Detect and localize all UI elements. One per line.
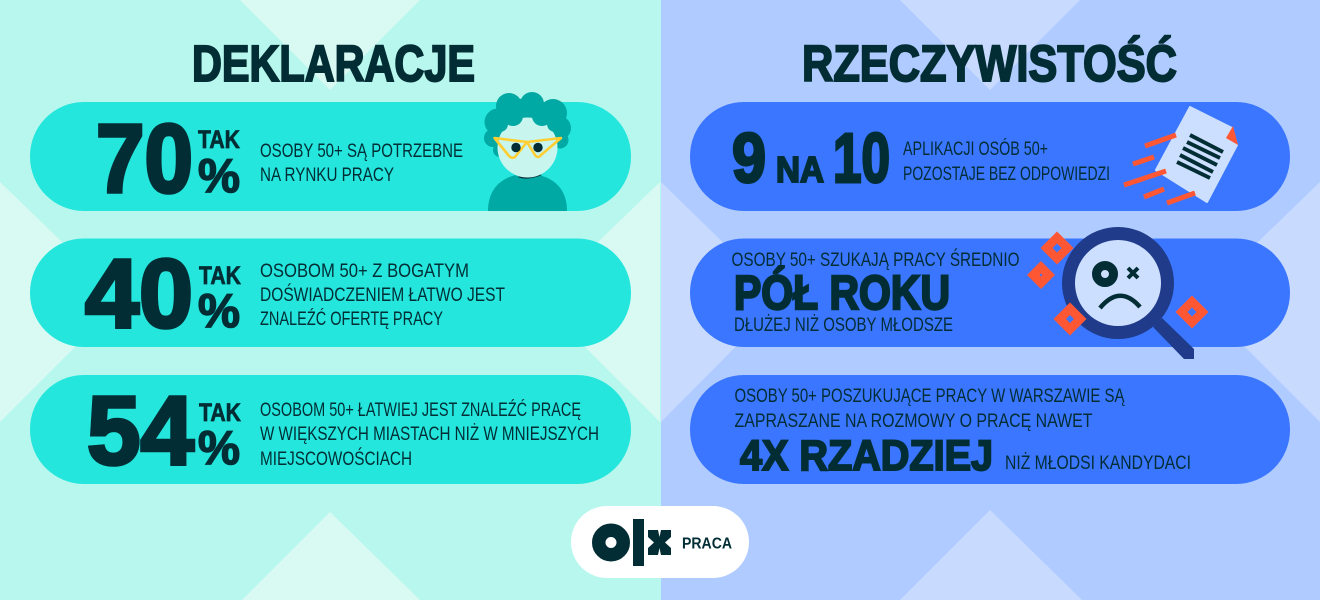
panel: 70 percent	[30, 102, 631, 213]
text: description: W WIĘKSZYCH MIASTACH NIŻ W MNIEJSZYCH	[260, 422, 599, 445]
stat: 70: 70	[96, 104, 193, 213]
text: description: NA RYNKU PRACY	[260, 164, 394, 186]
text: description	[260, 398, 599, 470]
text: description: OSOBOM 50+ ŁATWIEJ JEST ZNALEŹĆ PRACĘ	[260, 398, 581, 421]
text: outro: NIŻ MŁODSI KANDYDACI	[1005, 451, 1191, 474]
text: description: OSOBOM 50+ Z BOGATYM	[260, 260, 469, 282]
text: description	[260, 260, 505, 330]
text: description: APLIKACJI OSÓB 50+	[903, 137, 1048, 160]
heading: deklaracje: DEKLARACJE	[192, 35, 475, 92]
panel: pol roku	[690, 238, 1290, 347]
percent sign: %	[198, 284, 240, 337]
heading: rzeczywistosc: RZECZYWISTOŚĆ	[802, 35, 1177, 92]
text: description: DOŚWIADCZENIEM ŁATWO JEST	[260, 282, 505, 306]
text: description: MIEJSCOWOŚCIACH	[260, 446, 412, 470]
stat: pol roku: PÓŁ ROKU	[734, 265, 950, 320]
stat: 54: 54	[87, 376, 194, 485]
panel: 54 percent	[30, 375, 631, 485]
stat: 40: 40	[85, 239, 193, 348]
text: intro: OSOBY 50+ POSZUKUJĄCE PRACY W WARSZAWIE SĄ	[734, 385, 1125, 407]
panel: 4x rzadziej	[690, 375, 1290, 484]
text: description: ZNALEŹĆ OFERTĘ PRACY	[260, 307, 443, 330]
text: intro: ZAPRASZANE NA ROZMOWY O PRACĘ NAWET	[734, 410, 1093, 432]
stat: 9 na 10: 10	[833, 119, 890, 197]
text: description	[903, 137, 1110, 185]
percent sign: %	[198, 149, 240, 202]
stat: 9 na 10: NA	[776, 149, 824, 190]
label: tak: TAK	[199, 399, 241, 427]
text: description: POZOSTAJE BEZ ODPOWIEDZI	[903, 163, 1110, 185]
panel: background deklaracje	[0, 0, 661, 600]
label: tak: TAK	[198, 126, 240, 154]
percent sign: %	[198, 421, 240, 474]
panel: background rzeczywistosc	[661, 0, 1320, 600]
text: intro	[734, 385, 1125, 432]
text: description	[260, 140, 463, 186]
logo: olx praca	[571, 506, 749, 578]
text: outro: DŁUŻEJ NIŻ OSOBY MŁODSZE	[734, 313, 953, 336]
panel: 40 percent	[30, 238, 631, 348]
label: praca: PRACA	[682, 536, 732, 552]
panel: 9 na 10	[690, 102, 1290, 211]
stat: 9 na 10	[732, 119, 890, 197]
icon: person with glasses	[484, 92, 571, 211]
icon: magnifier with sad face	[1027, 232, 1208, 359]
text: description: OSOBY 50+ SĄ POTRZEBNE	[260, 140, 463, 162]
stat: 4x rzadziej: 4X RZADZIEJ	[740, 432, 993, 480]
text: intro: OSOBY 50+ SZUKAJĄ PRACY ŚREDNIO	[732, 247, 1020, 271]
icon: flying document	[1124, 107, 1238, 203]
stat: 9 na 10: 9	[732, 119, 766, 197]
label: tak: TAK	[199, 262, 241, 290]
